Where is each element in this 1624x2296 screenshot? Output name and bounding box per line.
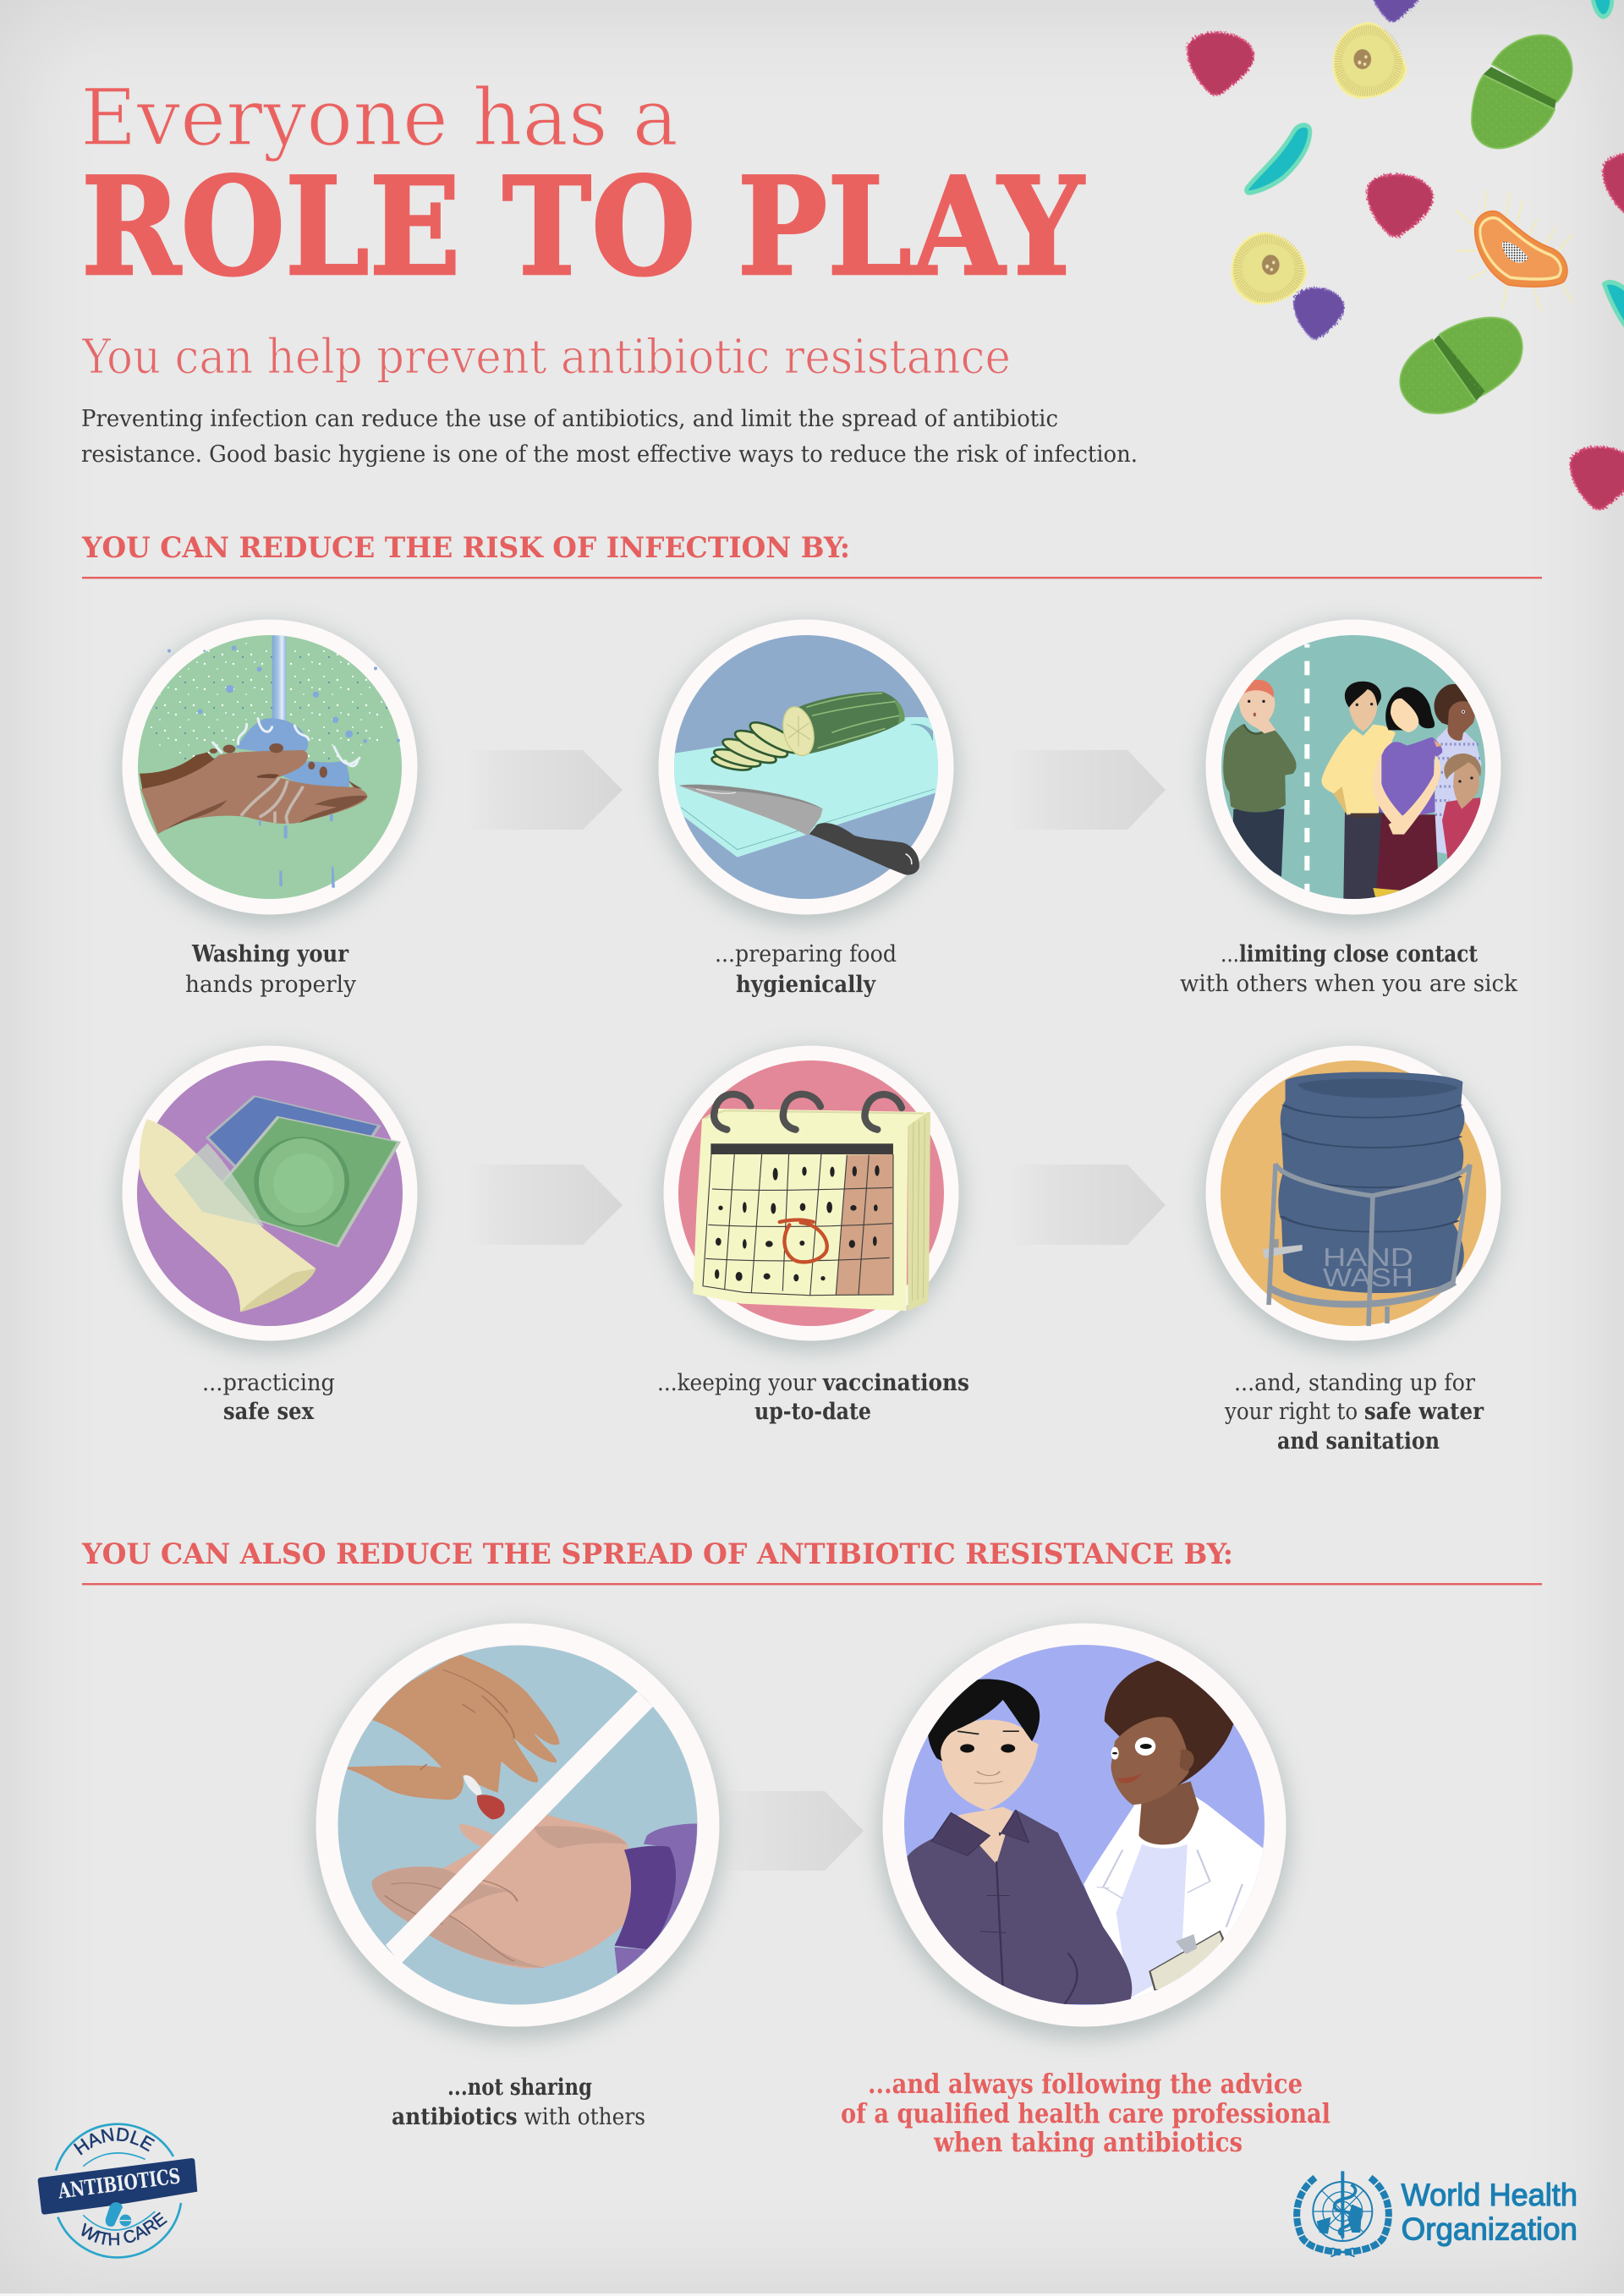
arrow row 3 [719, 1791, 864, 1871]
panel: vaccinations calendar [661, 1045, 962, 1351]
microbe: green pill one [1472, 35, 1572, 148]
panel: limiting contact [1203, 619, 1504, 924]
caption: safe water: and sanitation [1277, 1428, 1440, 1455]
water stand frame [1269, 1164, 1470, 1326]
microbe: yellow cell two [1232, 233, 1306, 304]
subtitle: You can help prevent antibiotic resistance [81, 330, 1011, 385]
caption: preparing food: ...preparing food [715, 941, 897, 967]
logo wordmark: World Health [1402, 2177, 1577, 2212]
arrows [469, 750, 1166, 1871]
caption: preparing food: hygienically [736, 972, 876, 998]
caption: not sharing: ...not sharing [447, 2074, 592, 2101]
caption: safe sex: ...practicing [202, 1370, 335, 1396]
panel: preparing food [656, 619, 957, 924]
microbe: green pill two [1400, 318, 1522, 414]
title [80, 72, 1085, 306]
prohibition slash [386, 1691, 653, 1964]
water drops [167, 645, 400, 888]
caption: safe water: ...and, standing up for [1234, 1370, 1475, 1396]
intro text: Preventing infection can reduce the use of antibiotics, and limit the spread of antibiotic [81, 406, 1058, 432]
badge: handle antibiotics with care [37, 2123, 198, 2259]
caption: not sharing: antibiotics with others [392, 2104, 645, 2130]
microbe: raspberry blobs [1188, 33, 1624, 509]
caption: preparing food [715, 941, 897, 998]
microbe: purple blobs [1294, 0, 1422, 339]
decorative microbes [1188, 0, 1624, 509]
hand wash label: HAND [1323, 1242, 1413, 1272]
caption: limiting contact [1180, 941, 1517, 997]
microbe: cyan rods [1247, 0, 1624, 331]
caption: safe water [1224, 1370, 1484, 1455]
caption: vaccinations: ...keeping your vaccinations [657, 1370, 969, 1396]
caption: limiting contact: ...limiting close contact [1221, 941, 1479, 967]
caption: health professional: when taking antibiotics [933, 2126, 1243, 2158]
caption: health professional: of a qualified health care professional [841, 2097, 1330, 2129]
panel: not sharing antibiotics [312, 1624, 723, 2039]
caption: vaccinations: up-to-date [754, 1399, 871, 1425]
caption: safe sex: safe sex [223, 1399, 315, 1425]
logo wordmark: Organization [1402, 2211, 1577, 2246]
arrow row 1 left [469, 750, 623, 830]
panel: washing hands [119, 619, 420, 924]
hand wash label: WASH [1323, 1263, 1413, 1292]
caption: limiting contact: with others when you are sick [1180, 971, 1517, 997]
caption: health professional [841, 2068, 1330, 2158]
badge text: handle: HANDLE [73, 2128, 156, 2155]
logo emblem [1297, 2171, 1389, 2256]
caption: vaccinations [657, 1370, 969, 1425]
intro text: resistance. Good basic hygiene is one of the most effective ways to reduce the risk of infection. [81, 441, 1138, 468]
microbe: yellow cell one [1334, 24, 1406, 97]
caption: health professional: ...and always following the advice [868, 2068, 1303, 2100]
microbe: orange bacterium [1456, 190, 1572, 311]
panel: health professional [879, 1624, 1290, 2039]
title line: Everyone has a: Everyone has a [80, 72, 678, 163]
caption: safe water: your right to safe water [1224, 1399, 1484, 1425]
panel: safe water [1203, 1045, 1504, 1351]
caption: safe sex [202, 1370, 335, 1425]
arrow row 1 right [1011, 750, 1166, 830]
logo: World Health Organization [1297, 2171, 1577, 2256]
caption: washing hands [185, 941, 356, 998]
caption: washing hands: hands properly [185, 972, 356, 998]
arrow row 2 right [1011, 1164, 1166, 1245]
title line: ROLE TO PLAY: ROLE TO PLAY [81, 147, 1085, 306]
intro text [81, 406, 1138, 468]
panel: safe sex [119, 1045, 420, 1351]
logo wordmark [1402, 2177, 1577, 2246]
section heading: reduce spread: YOU CAN ALSO REDUCE THE SPREAD OF ANTIBIOTIC RESISTANCE BY: [81, 1537, 1233, 1571]
badge text: antibiotics: ANTIBIOTICS [56, 2163, 182, 2204]
hand wash label [1323, 1242, 1413, 1292]
caption: washing hands: Washing your [191, 941, 349, 967]
arrow row 2 left [469, 1164, 623, 1245]
caption: not sharing [392, 2074, 645, 2130]
section heading: reduce risk: YOU CAN REDUCE THE RISK OF INFECTION BY: [81, 531, 850, 565]
badge text: with care: WITH CARE [81, 2212, 167, 2246]
